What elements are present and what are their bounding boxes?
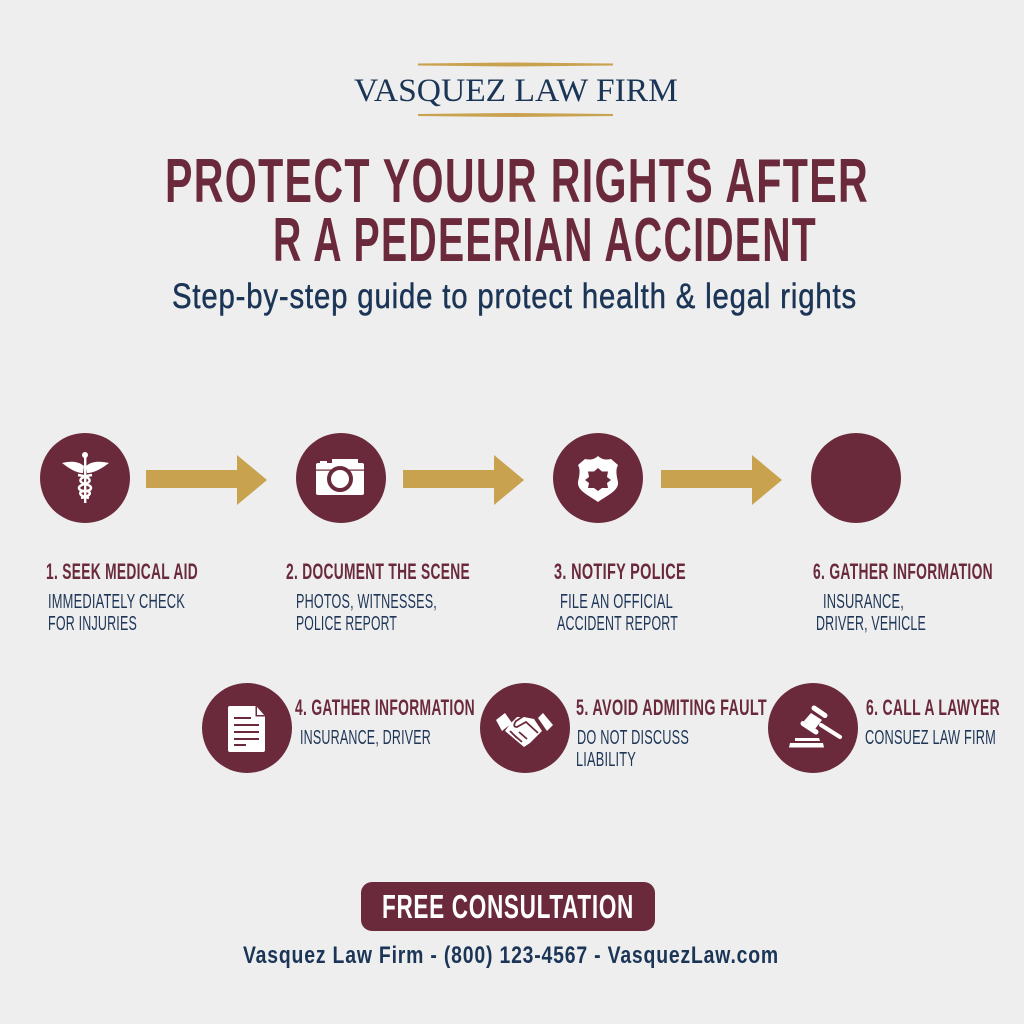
logo: Vasquez Law Firm: VASQUEZ LAW FIRM	[354, 73, 678, 109]
top-row gather information text: INSURANCE,	[823, 591, 904, 613]
step 5 text	[576, 695, 767, 771]
top-row gather information text	[813, 559, 993, 635]
step 4 text	[295, 695, 475, 749]
step 5 text: LIABILITY	[576, 749, 636, 771]
call to action button: FREE CONSULTATION	[382, 888, 634, 925]
step 6 icon: gavel	[768, 683, 858, 773]
step 6 text	[865, 695, 1000, 749]
step 2 text: POLICE REPORT	[296, 613, 397, 635]
step 4 text: 4. GATHER INFORMATION	[295, 695, 475, 720]
step 3 text: ACCIDENT REPORT	[557, 613, 678, 635]
step 5 icon: handshake	[480, 683, 570, 773]
step 3 icon: police badge	[553, 433, 643, 523]
step 4 top-row circle: empty	[811, 433, 901, 523]
arrow 1	[146, 455, 267, 505]
step 3 text: 3. NOTIFY POLICE	[554, 559, 686, 584]
arrow 2	[403, 455, 524, 505]
step 4 icon: document	[202, 683, 292, 773]
step 1 text: FOR INJURIES	[48, 613, 137, 635]
step 2 text: 2. DOCUMENT THE SCENE	[286, 559, 470, 584]
step 2 text	[286, 559, 470, 635]
arrow 3	[661, 455, 782, 505]
step 1 text	[46, 559, 198, 635]
step 2 icon: camera	[296, 433, 386, 523]
step 1 icon: caduceus	[40, 433, 130, 523]
top-row gather information text: DRIVER, VEHICLE	[816, 613, 926, 635]
step 1 text: IMMEDIATELY CHECK	[48, 591, 185, 613]
step 1 text: 1. SEEK MEDICAL AID	[46, 559, 198, 584]
step 5 text: 5. AVOID ADMITING FAULT	[576, 695, 767, 720]
title	[165, 147, 869, 275]
step 3 text	[554, 559, 686, 635]
subtitle: Step-by-step guide to protect health & legal rights	[172, 277, 857, 316]
contact line: Vasquez Law Firm - (800) 123-4567 - VasquezLaw.com	[243, 942, 779, 969]
logo: Vasquez Law Firm	[354, 62, 678, 117]
step 3 text: FILE AN OFFICIAL	[560, 591, 673, 613]
call to action button	[361, 882, 655, 931]
step 5 text: DO NOT DISCUSS	[577, 727, 689, 749]
step 4 text: INSURANCE, DRIVER	[300, 727, 431, 749]
step 2 text: PHOTOS, WITNESSES,	[296, 591, 437, 613]
